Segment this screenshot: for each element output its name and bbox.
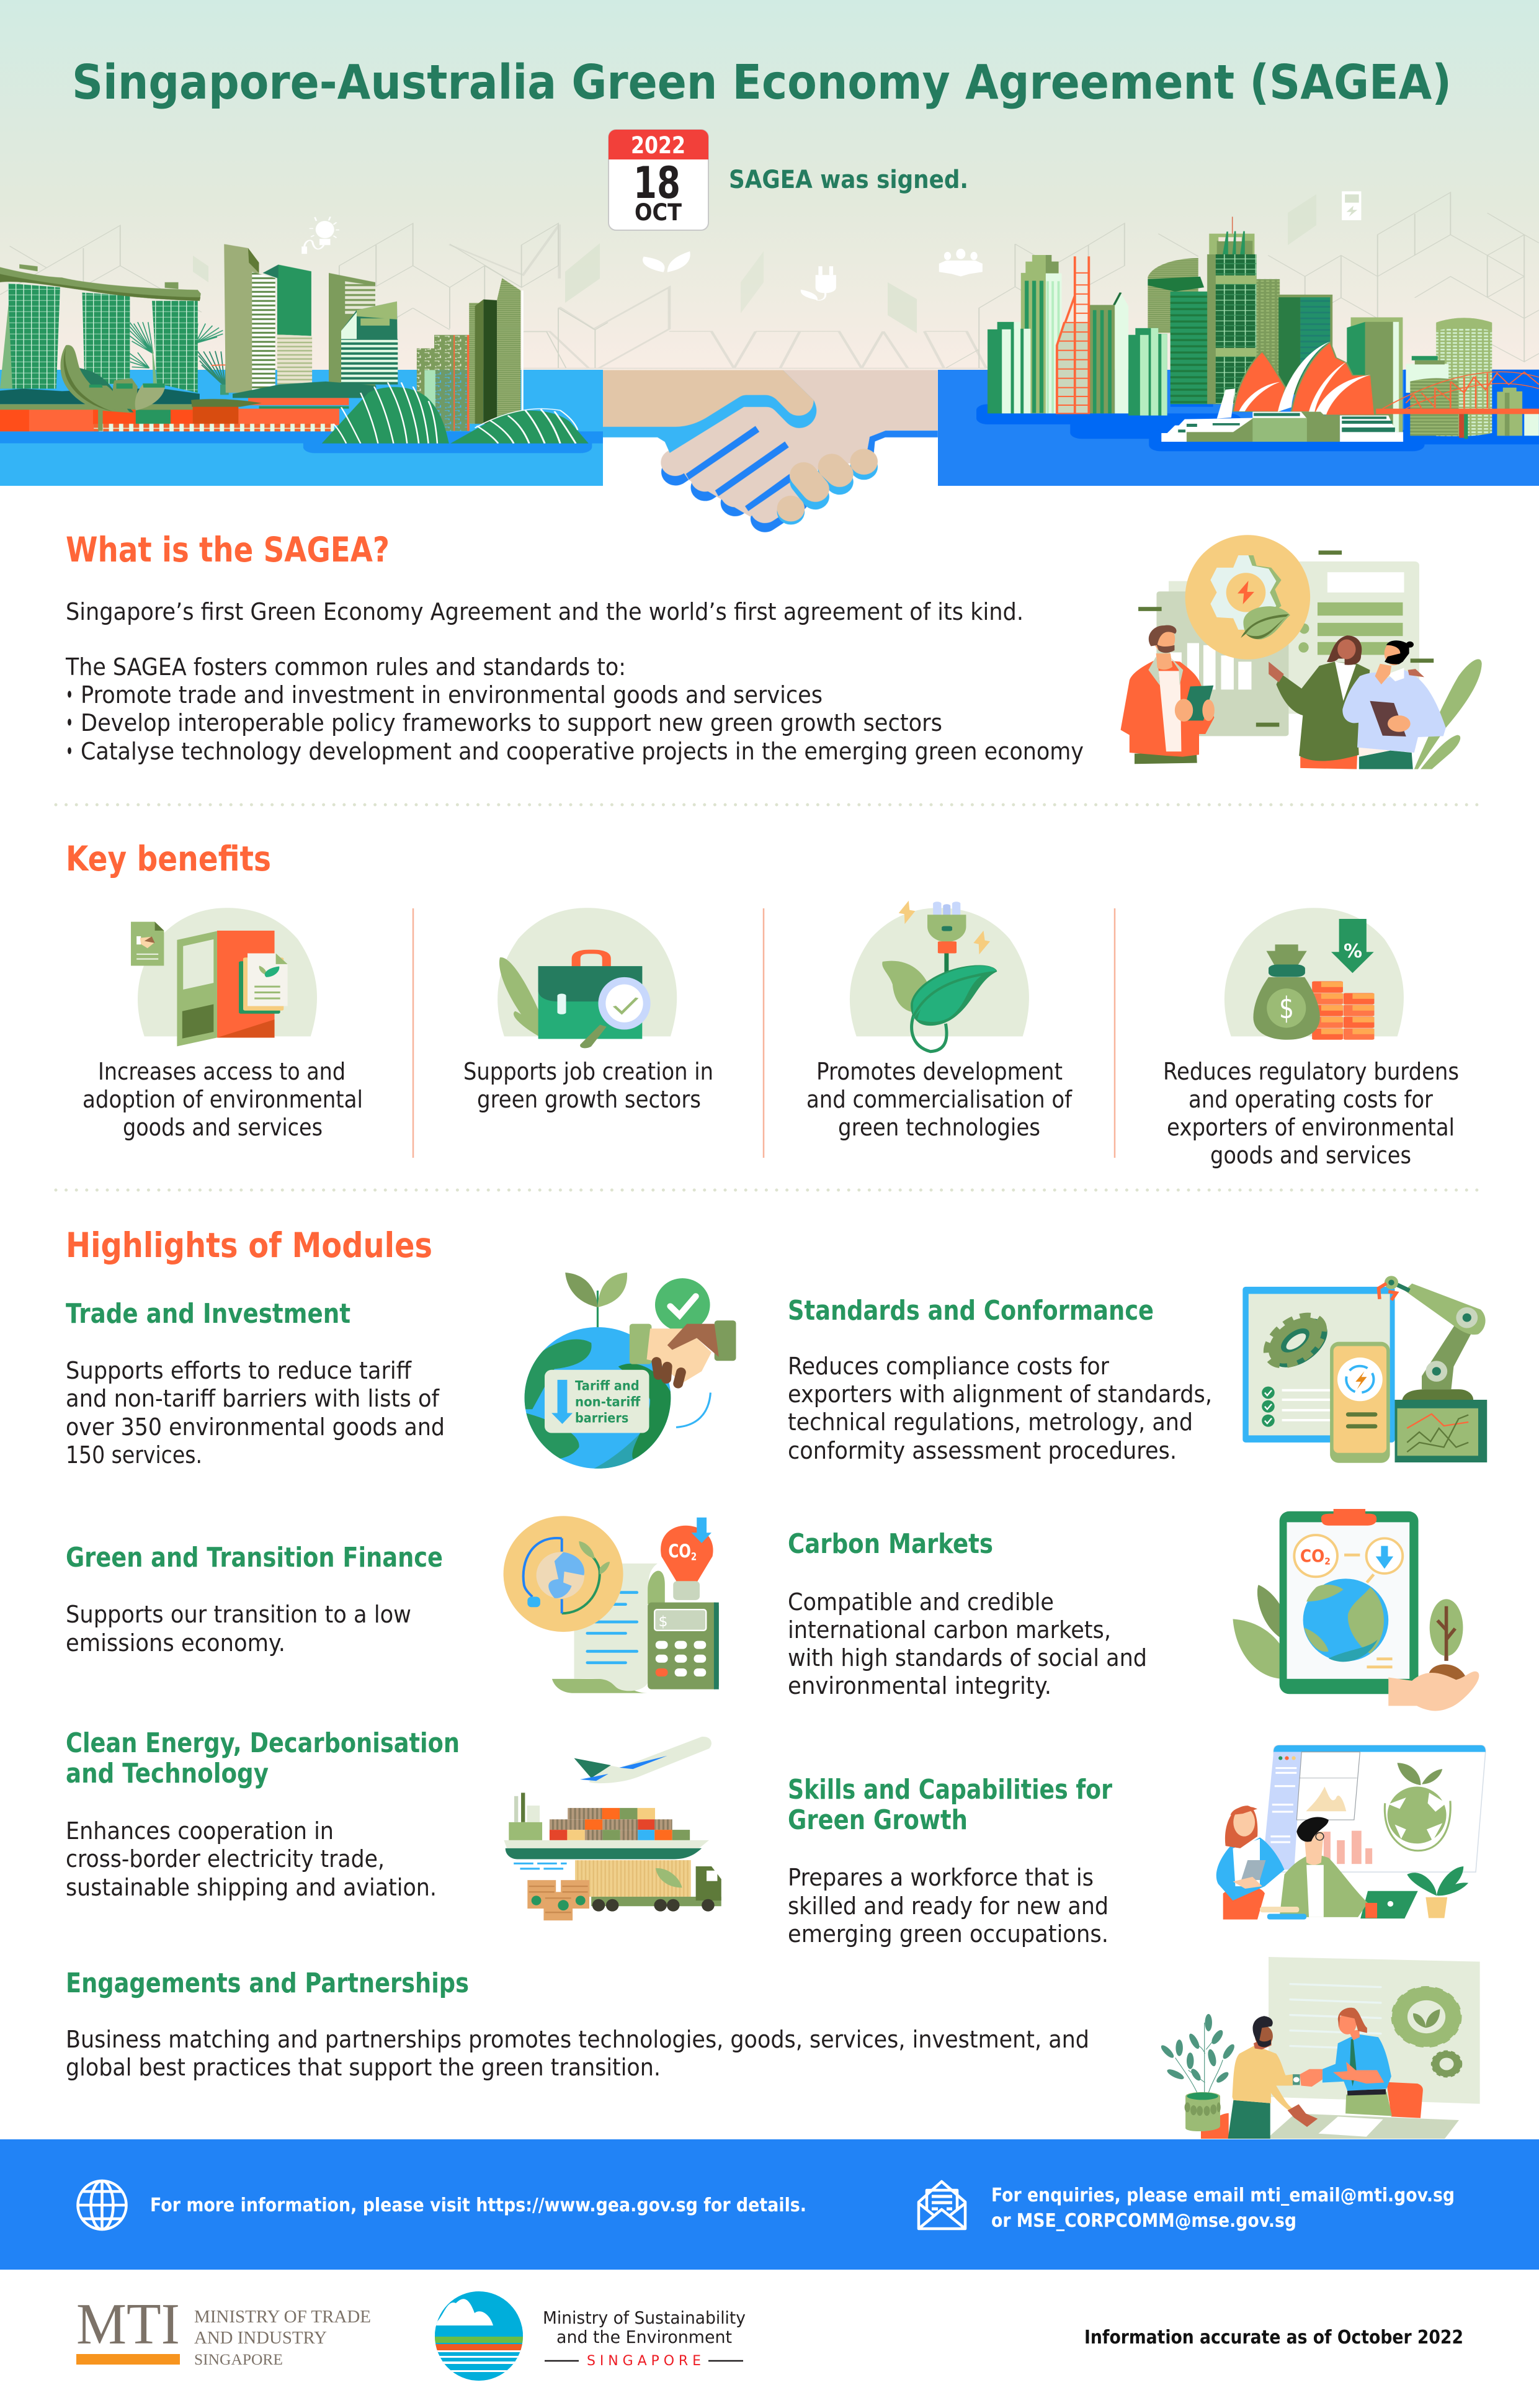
teal roof and base bbox=[0, 388, 200, 404]
module: standards and conformance: exporters with alignment of standards, bbox=[788, 1381, 1212, 1408]
benefit 4: icon money bag bbox=[1225, 908, 1404, 1040]
benefit 4 text: exporters of environmental bbox=[1167, 1114, 1455, 1142]
right hand shadows bbox=[676, 442, 795, 519]
tall tan-green tower bbox=[224, 244, 259, 393]
handshake bbox=[603, 370, 938, 519]
logo: MTI: MTI bbox=[76, 2292, 180, 2357]
colonnade bbox=[94, 424, 334, 431]
module: green and transition finance: emissions economy. bbox=[66, 1629, 285, 1657]
benefit 2 text bbox=[463, 1058, 713, 1114]
right cluster bbox=[1351, 317, 1403, 432]
module: carbon markets: international carbon markets, bbox=[788, 1616, 1111, 1644]
module: standards and conformance: Reduces compliance costs for bbox=[788, 1353, 1109, 1381]
illustration: globe with tariff tag: barriers bbox=[575, 1411, 628, 1426]
singapore skyline bbox=[0, 244, 603, 485]
module: standards and conformance: conformity assessment procedures. bbox=[788, 1437, 1177, 1465]
domes bbox=[322, 387, 449, 444]
globe bbox=[1385, 1763, 1450, 1851]
logo: MTI: SINGAPORE bbox=[194, 2352, 283, 2368]
header background bbox=[0, 0, 1539, 370]
module: carbon markets: with high standards of social and bbox=[788, 1644, 1147, 1672]
woman bbox=[1269, 635, 1370, 769]
illustration: finance document and calculator: CO bbox=[668, 1541, 698, 1562]
red ladder tower bbox=[1057, 256, 1089, 413]
gear bbox=[1259, 1306, 1337, 1377]
illustration: carbon clipboard: 2 bbox=[1324, 1556, 1331, 1567]
module: trade and investment: 150 services. bbox=[66, 1441, 202, 1469]
water: left bbox=[0, 370, 603, 486]
illustration: carbon clipboard: CO bbox=[1300, 1546, 1328, 1566]
left cluster bbox=[1021, 255, 1058, 413]
tower with horizontal bands bbox=[1171, 292, 1208, 404]
module: standards and conformance: Standards and Conformance bbox=[788, 1295, 1154, 1327]
marina bay sands towers bbox=[7, 284, 198, 393]
footer contact band bbox=[0, 2139, 1539, 2270]
benefit 4: icon money bag: % bbox=[1344, 941, 1362, 962]
benefit 2 text: green growth sectors bbox=[477, 1086, 701, 1114]
module: carbon markets: Carbon Markets bbox=[788, 1528, 993, 1560]
icon: globe bbox=[78, 2181, 127, 2229]
man with laptop bbox=[1260, 1817, 1418, 1920]
near supertree bbox=[198, 351, 267, 387]
text block: what is the SAGEA: Singapore’s first Green Economy Agreement and the world’s first agreement of its kind. bbox=[66, 598, 1024, 626]
logo: MTI bbox=[76, 2292, 371, 2368]
benefit 1: icon open door bbox=[131, 908, 317, 1046]
chairs bbox=[1386, 2082, 1423, 2118]
illustration: finance document and calculator: $ bbox=[659, 1613, 668, 1630]
far supertree bbox=[130, 322, 223, 368]
module: clean energy: Clean Energy, Decarbonisation bbox=[66, 1727, 460, 1759]
illustration: plane ship truck bbox=[504, 1737, 721, 1920]
module: trade and investment: Supports efforts to reduce tariff bbox=[66, 1357, 412, 1385]
section heading: highlights of modules: Highlights of Modules bbox=[66, 1225, 432, 1265]
module: skills and capabilities bbox=[788, 1774, 1112, 1948]
benefit 4 text: and operating costs for bbox=[1189, 1086, 1433, 1114]
benefit 4 text: goods and services bbox=[1210, 1142, 1411, 1170]
date card: 18 bbox=[633, 158, 680, 208]
arc roof bbox=[233, 382, 376, 398]
illustration: business handshake bbox=[1159, 1957, 1480, 2139]
module: engagements and partnerships bbox=[66, 1967, 1089, 2082]
logo: MTI: MINISTRY OF TRADE bbox=[194, 2307, 371, 2327]
plants bbox=[1414, 659, 1482, 769]
module: trade and investment: over 350 environmental goods and bbox=[66, 1413, 445, 1441]
curved building bbox=[1148, 258, 1198, 333]
man in blue shirt bbox=[1300, 2008, 1392, 2116]
illustration: globe with tariff tag: non-tariff bbox=[575, 1395, 641, 1410]
module: skills and capabilities: skilled and ready for new and bbox=[788, 1892, 1109, 1920]
module: clean energy: Enhances cooperation in bbox=[66, 1817, 334, 1845]
module: engagements and partnerships: global best practices that support the green transition. bbox=[66, 2054, 661, 2082]
benefit 3 text: Promotes development bbox=[816, 1058, 1063, 1086]
module: engagements and partnerships: Business matching and partnerships promotes technologies, goods, services, investment, and bbox=[66, 2026, 1089, 2054]
module: carbon markets: Compatible and credible bbox=[788, 1588, 1054, 1616]
finger gaps bbox=[686, 426, 790, 511]
harbour bridge bbox=[1383, 372, 1539, 409]
module: trade and investment bbox=[66, 1298, 445, 1469]
man in yellow sweater bbox=[1228, 2016, 1318, 2139]
section heading: What is the SAGEA: What is the SAGEA? bbox=[66, 530, 390, 570]
plant bbox=[1407, 1866, 1468, 1896]
module: green and transition finance: Supports our transition to a low bbox=[66, 1601, 411, 1629]
icon: phone bbox=[1342, 191, 1361, 220]
illustration: people discussing green economy bbox=[1121, 535, 1482, 769]
section heading: key benefits: Key benefits bbox=[66, 839, 271, 879]
right sleeve bbox=[867, 431, 938, 457]
illustration: standards robot arm bbox=[1242, 1276, 1487, 1463]
gears bbox=[1392, 1987, 1461, 2077]
module: engagements and partnerships: Engagements and Partnerships bbox=[66, 1967, 469, 1999]
benefit 1 text bbox=[83, 1058, 363, 1142]
central tower bbox=[1209, 234, 1254, 254]
module: clean energy: sustainable shipping and aviation. bbox=[66, 1874, 437, 1902]
translucent parallelogram decorations bbox=[193, 194, 1316, 333]
text block: what is the SAGEA: Catalyse technology development and cooperative projects in the emerging green economy bbox=[81, 738, 1084, 766]
benefit 1 text: Increases access to and bbox=[98, 1058, 346, 1086]
module: clean energy bbox=[66, 1727, 460, 1902]
benefit 1 text: adoption of environmental bbox=[83, 1086, 363, 1114]
water: right bbox=[938, 370, 1539, 486]
background geometric line pattern bbox=[0, 192, 1539, 369]
module: trade and investment: Trade and Investment bbox=[66, 1298, 350, 1330]
illustration: globe with tariff tag: Tariff and bbox=[575, 1379, 640, 1394]
module: clean energy: and Technology bbox=[66, 1758, 269, 1789]
man left bbox=[1121, 625, 1215, 764]
australia skyline bbox=[976, 217, 1539, 451]
illustration: globe with tariff tag bbox=[520, 1273, 736, 1475]
illustration: finance document and calculator bbox=[504, 1516, 719, 1693]
left fingers bbox=[791, 462, 864, 512]
benefit 3 text: green technologies bbox=[838, 1114, 1040, 1142]
woman with tablet bbox=[1216, 1806, 1285, 1920]
illustration: skills dashboard with two people bbox=[1216, 1745, 1486, 1920]
icon: leaves bbox=[643, 251, 690, 272]
module: carbon markets: environmental integrity. bbox=[788, 1672, 1051, 1700]
text block: what is the SAGEA: • bbox=[66, 738, 73, 766]
gear with bolt and leaf bbox=[1210, 555, 1290, 640]
footer text: more information: For more information, please visit https://www.gea.gov.sg for details. bbox=[150, 2195, 806, 2216]
front tower bbox=[341, 302, 398, 385]
logo: MSE: Ministry of Sustainability bbox=[543, 2307, 746, 2328]
plant bbox=[1159, 2014, 1236, 2131]
text block: what is the SAGEA bbox=[65, 598, 1084, 766]
left hand bbox=[603, 370, 814, 427]
footer text: enquiries: or MSE_CORPCOMM@mse.gov.sg bbox=[991, 2210, 1296, 2232]
right hand bbox=[670, 370, 938, 517]
logo: MTI: AND INDUSTRY bbox=[194, 2329, 327, 2348]
text block: what is the SAGEA: The SAGEA fosters common rules and standards to: bbox=[65, 653, 626, 681]
text block: what is the SAGEA: • bbox=[66, 709, 73, 737]
date card: 2022 bbox=[631, 132, 685, 159]
logo: MSE bbox=[434, 2289, 746, 2383]
left hand shadow bbox=[603, 370, 816, 453]
benefit 2: icon briefcase bbox=[497, 908, 677, 1048]
module: standards and conformance: technical regulations, metrology, and bbox=[788, 1408, 1193, 1436]
illustration: finance document and calculator: 2 bbox=[691, 1551, 697, 1563]
footer text: enquiries bbox=[991, 2185, 1455, 2232]
footer text: enquiries: For enquiries, please email mti_email@mti.gov.sg bbox=[991, 2185, 1455, 2206]
module: skills and capabilities: Prepares a workforce that is bbox=[788, 1864, 1094, 1892]
module: carbon markets bbox=[788, 1528, 1147, 1700]
benefit 1 text: goods and services bbox=[123, 1114, 323, 1142]
harbour bands bbox=[976, 370, 1539, 451]
module: clean energy: cross-border electricity trade, bbox=[66, 1845, 385, 1873]
opera house bbox=[1161, 341, 1403, 442]
icon: envelope bbox=[919, 2182, 965, 2229]
module: skills and capabilities: Green Growth bbox=[788, 1804, 968, 1836]
icon: people bbox=[939, 249, 983, 277]
benefit 3 text: and commercialisation of bbox=[806, 1086, 1073, 1114]
icon: plug bbox=[801, 266, 836, 300]
benefit 2 text: Supports job creation in bbox=[463, 1058, 713, 1086]
module: trade and investment: and non-tariff barriers with lists of bbox=[66, 1385, 440, 1413]
man right bbox=[1342, 640, 1446, 769]
benefit 4 text: Reduces regulatory burdens bbox=[1163, 1058, 1459, 1086]
module: green and transition finance: Green and Transition Finance bbox=[66, 1542, 443, 1573]
module: skills and capabilities: Skills and Capabilities for bbox=[788, 1774, 1112, 1806]
benefit 4: icon money bag: $ bbox=[1279, 991, 1294, 1026]
icon: light bulb bbox=[301, 217, 339, 254]
footer note: Information accurate as of October 2022 bbox=[1084, 2327, 1463, 2348]
logo: MSE: SINGAPORE bbox=[587, 2353, 701, 2369]
textured towers bbox=[417, 348, 436, 431]
module: standards and conformance bbox=[788, 1295, 1212, 1465]
module: skills and capabilities: emerging green occupations. bbox=[788, 1920, 1109, 1948]
benefit 3 text bbox=[806, 1058, 1073, 1142]
text block: what is the SAGEA: Develop interoperable policy frameworks to support new green growth sectors bbox=[81, 709, 942, 737]
illustration: carbon clipboard bbox=[1233, 1509, 1479, 1711]
date card bbox=[609, 130, 708, 230]
text block: what is the SAGEA: Promote trade and investment in environmental goods and services bbox=[81, 681, 823, 709]
text block: what is the SAGEA: • bbox=[66, 681, 73, 709]
date caption: SAGEA was signed. bbox=[729, 166, 968, 194]
logo: MSE: and the Environment bbox=[556, 2327, 732, 2347]
date card: OCT bbox=[635, 199, 682, 226]
benefit 4 text bbox=[1163, 1058, 1459, 1170]
band below shore bbox=[0, 431, 603, 444]
artscience museum bbox=[60, 345, 165, 431]
skypark bbox=[19, 264, 179, 289]
desk bbox=[1267, 2113, 1459, 2139]
module: green and transition finance bbox=[66, 1542, 443, 1657]
benefit 3: icon plug leaf bbox=[850, 901, 1029, 1052]
